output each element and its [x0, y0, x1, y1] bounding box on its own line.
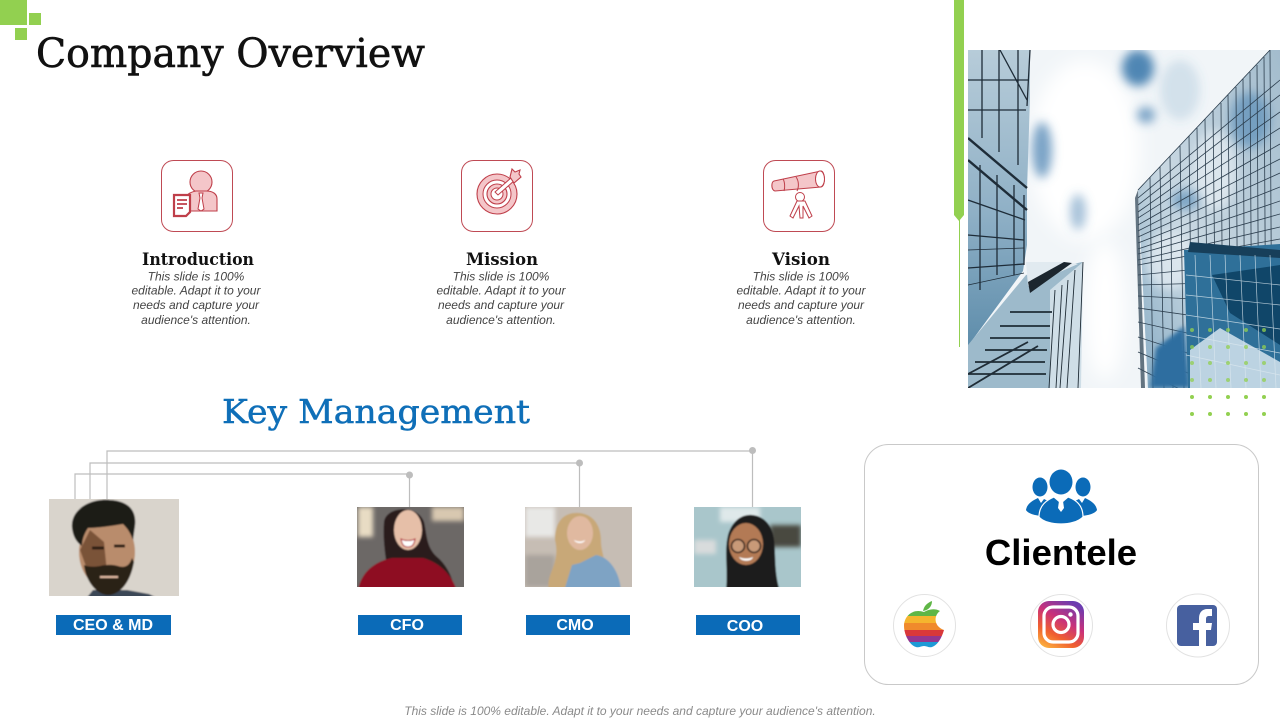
heading: mission: Mission: [466, 250, 538, 270]
icon: businessman with document: [162, 160, 232, 232]
label: CFO: CFO: [390, 617, 424, 634]
photo: CMO portrait: [525, 507, 632, 587]
text: introduction body: This slide is 100%: [148, 270, 245, 284]
text: vision body: This slide is 100%: [753, 270, 850, 284]
org connector lines: [75, 447, 756, 507]
photo: COO portrait: [694, 507, 801, 587]
text: mission body: editable. Adapt it to your: [437, 284, 566, 298]
right building: [1138, 50, 1280, 388]
label: CEO & MD: CEO & MD: [73, 617, 153, 634]
green dot grid: [1190, 328, 1266, 416]
icon: instagram logo: [1030, 594, 1092, 656]
icon: target with arrow: [462, 160, 532, 232]
photo: skyscrapers against clouds: [968, 50, 1280, 388]
heading: vision: Vision: [771, 250, 830, 270]
text: introduction body: audience's attention.: [141, 313, 251, 327]
icon: apple logo: [894, 594, 956, 656]
icon: facebook logo: [1166, 594, 1230, 657]
heading: key management: Key Management: [222, 392, 530, 431]
icon: telescope on tripod: [764, 160, 834, 232]
green vertical accent bar: [954, 0, 964, 347]
text: mission body: audience's attention.: [446, 313, 556, 327]
panel: clientele: [864, 444, 1258, 684]
text: vision body: editable. Adapt it to your: [737, 284, 866, 298]
text: vision body: audience's attention.: [746, 313, 856, 327]
panel: mission: [437, 160, 566, 327]
label: CFO: [358, 615, 462, 635]
text: mission body: This slide is 100%: [453, 270, 550, 284]
title: Company Overview: [36, 31, 425, 77]
dark reflection block: [1184, 244, 1280, 388]
corner accent squares: [0, 0, 41, 40]
footer note: This slide is 100% editable. Adapt it to your needs and capture your audience's attention.: [404, 704, 876, 718]
label: CMO: [526, 615, 630, 635]
left building: [968, 50, 1030, 346]
label: CMO: CMO: [556, 617, 594, 634]
label: COO: [696, 615, 800, 635]
label: CEO & MD: [56, 615, 171, 635]
text: introduction body: needs and capture your: [133, 298, 260, 312]
text: vision body: needs and capture your: [738, 298, 865, 312]
panel: vision: [737, 160, 866, 327]
photo: CFO portrait: [357, 507, 464, 587]
photo: CEO portrait: [49, 499, 179, 596]
label: COO: COO: [727, 618, 763, 635]
text: mission body: needs and capture your: [438, 298, 565, 312]
panel: introduction: [132, 160, 261, 327]
heading: introduction: Introduction: [142, 250, 254, 270]
text: introduction body: editable. Adapt it to your: [132, 284, 261, 298]
lower left tower: [968, 262, 1082, 388]
blue cloud reflection: [1150, 326, 1190, 388]
heading: clientele: Clientele: [985, 532, 1137, 573]
icon: group of people: [1026, 470, 1097, 524]
